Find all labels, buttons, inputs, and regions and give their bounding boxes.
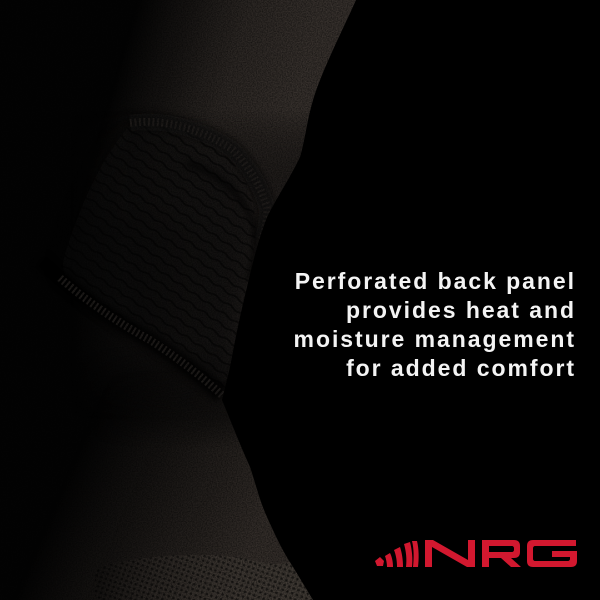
caption text: for added comfort: [346, 355, 576, 381]
logo: NRG: [375, 540, 577, 567]
lower fabric highlight: [52, 401, 313, 600]
lower seam: [58, 275, 224, 398]
ribbed cuff: [95, 555, 313, 600]
sleeve silhouette: [38, 0, 356, 600]
photo: black knee sleeve with perforated back panel: [38, 0, 356, 600]
caption text: provides heat and: [346, 297, 576, 323]
letters: NRG: [425, 540, 577, 567]
upper seam: [130, 122, 267, 240]
mid fabric light: [122, 186, 284, 386]
icon: signal arcs: [375, 541, 419, 567]
upper fabric highlight: [129, 0, 356, 174]
perforated back panel: [127, 132, 254, 377]
inner panel arc: [187, 163, 255, 280]
caption text: Perforated back panel: [295, 268, 576, 294]
caption text: moisture management: [294, 326, 576, 352]
fabric texture: [58, 0, 356, 600]
caption text: [294, 268, 576, 381]
